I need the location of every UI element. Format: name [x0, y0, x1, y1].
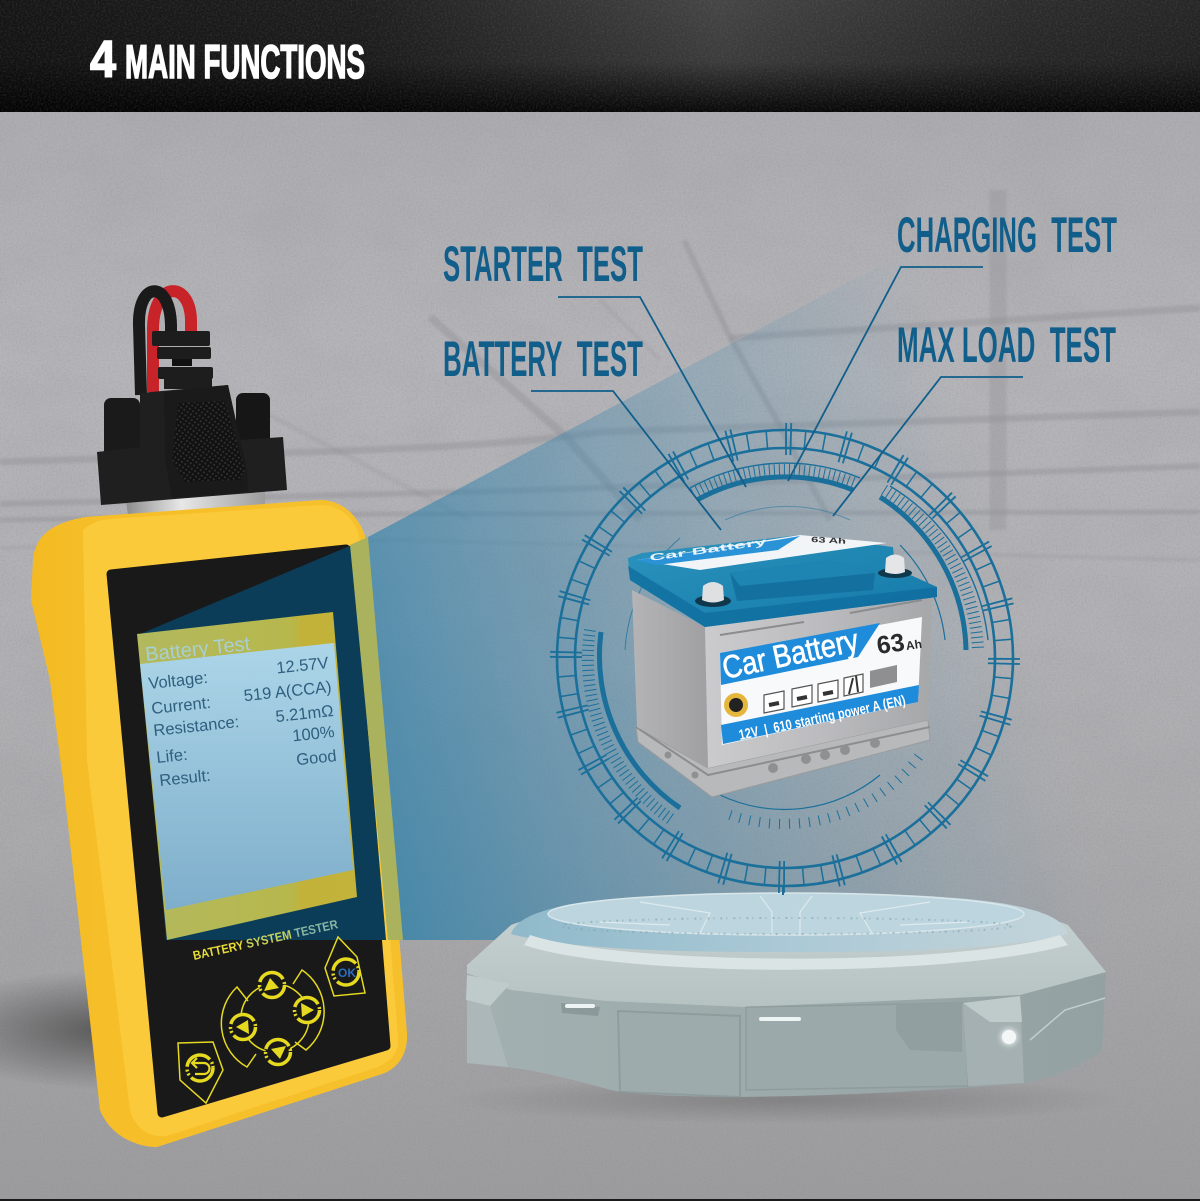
- battery terminals: [695, 554, 912, 607]
- battery lid: [628, 535, 937, 627]
- battery right face: [705, 590, 932, 768]
- screen lcd area: [140, 643, 353, 910]
- screen readings: 519 A(CCA): [243, 678, 332, 705]
- connector plug: [97, 385, 287, 516]
- leader line: charging test: [788, 267, 983, 481]
- battery side label: [720, 617, 922, 745]
- shadow on wall behind device: [0, 970, 300, 1090]
- button: back: [178, 1042, 223, 1103]
- connector hood face: [164, 385, 248, 498]
- outer ring lines: [557, 430, 1013, 886]
- pedestal panels: [466, 975, 1105, 1097]
- ring rungs: [566, 439, 1004, 877]
- thumb screws: [104, 398, 140, 464]
- screen readings: Current:: [151, 694, 212, 718]
- directional pad: [221, 970, 324, 1067]
- screen: [137, 612, 357, 940]
- pedestal: [466, 893, 1106, 1097]
- screen readings: Voltage:: [148, 669, 209, 693]
- pedestal top surface: [511, 893, 1068, 952]
- title: [90, 31, 365, 89]
- inner arcs: [625, 538, 680, 650]
- label capacity: 63Ah: [875, 626, 923, 660]
- label vehicle icons: [764, 674, 863, 713]
- connector body: [97, 385, 287, 505]
- button: ok: OK: [338, 966, 356, 980]
- battery handle: [730, 560, 875, 601]
- leader line: starter test: [558, 297, 746, 487]
- screen readings: Resistance:: [153, 713, 240, 740]
- ring major ticks: [566, 439, 1004, 877]
- background: ceiling beams: [0, 190, 1200, 560]
- car battery: [628, 535, 937, 797]
- connector cable: [139, 291, 213, 395]
- pedestal lower body: [467, 972, 1106, 1097]
- label: starter test: STARTER TEST: [443, 236, 643, 292]
- label blue footer: [721, 685, 919, 744]
- screen readings: 5.21mΩ: [275, 702, 334, 726]
- pedestal inset disc: [548, 893, 1024, 935]
- tech ring around battery: [557, 430, 1013, 895]
- red wire: [153, 291, 191, 392]
- screen title: Battery Test: [144, 633, 252, 666]
- left thick arc: [599, 632, 680, 808]
- dpad buttons: [230, 972, 320, 1064]
- strain relief: [152, 331, 213, 389]
- label seal: [724, 693, 748, 717]
- dpad arrows: [236, 978, 314, 1059]
- battery top sticker text: Car Battery: [649, 536, 768, 564]
- battery top sticker: [637, 535, 887, 570]
- beam tint on device edge: [350, 537, 403, 940]
- dpad wedges: [221, 970, 324, 1067]
- device brand text: BATTERY SYSTEM TESTER: [192, 917, 339, 963]
- screen readings: [148, 654, 337, 790]
- device body: [31, 500, 407, 1147]
- screen readings: Good: [295, 747, 337, 769]
- black wire: [139, 291, 171, 395]
- screen readings: Result:: [159, 767, 211, 790]
- beam tint on device panel: [140, 545, 386, 940]
- right thick arc: [880, 497, 966, 650]
- top thick arc: [697, 477, 853, 500]
- title: MAIN FUNCTIONS: [125, 35, 365, 88]
- label blue header: [720, 623, 880, 685]
- header bar: [0, 0, 1200, 112]
- device front panel: [111, 549, 386, 1113]
- label barcode: [870, 665, 897, 688]
- bottom marker: [782, 886, 784, 895]
- screen readings: Life:: [156, 746, 188, 767]
- pedestal light strips: [565, 1004, 801, 1021]
- title: 4: [90, 31, 116, 89]
- bottom edge line: [0, 1199, 1200, 1201]
- leader line: battery test: [531, 391, 721, 530]
- label: battery test: BATTERY TEST: [443, 331, 643, 387]
- label title: Car Battery: [719, 622, 861, 686]
- button: ok: [325, 937, 365, 996]
- screen readings: 100%: [292, 723, 336, 745]
- tester device: [31, 500, 407, 1147]
- battery base: [636, 720, 930, 797]
- hood mesh: [172, 401, 245, 482]
- screen readings: 12.57V: [276, 654, 329, 677]
- pedestal glow dot: [1001, 1029, 1017, 1045]
- blue projection beam: [140, 203, 1100, 940]
- battery left face: [632, 590, 708, 768]
- label spec text: 12V | 610 starting power A (EN): [738, 693, 907, 744]
- metal shell: [126, 489, 265, 516]
- leader line: max load test: [833, 377, 1023, 516]
- device bevel highlight: [83, 505, 398, 1136]
- shadow under pedestal: [445, 1076, 1125, 1124]
- battery top sticker capacity: 63 Ah: [811, 535, 846, 546]
- pedestal upper body: [467, 898, 1106, 1007]
